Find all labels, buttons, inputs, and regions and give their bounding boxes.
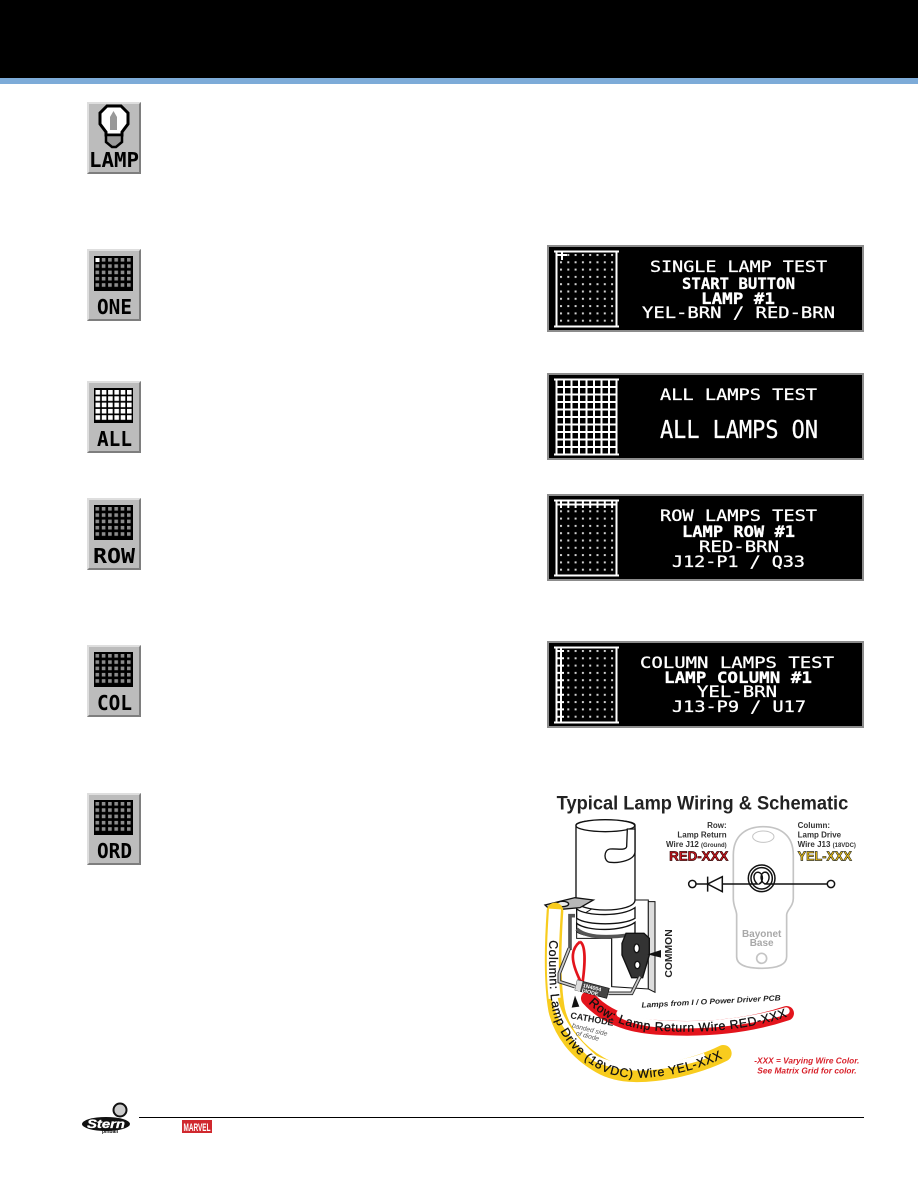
panel: row lamps test display: LAMP ROW #1 xyxy=(682,522,795,541)
column wire label xyxy=(798,821,856,864)
icon: all lamps button: ALL xyxy=(97,427,132,451)
panel: column lamps test display xyxy=(548,642,863,727)
wire color note xyxy=(754,1057,859,1075)
wire color note: See Matrix Grid for color. xyxy=(757,1066,857,1075)
ground strap xyxy=(570,916,630,950)
panel: column lamps test display: YEL-BRN xyxy=(697,682,777,701)
panel: row lamps test display xyxy=(548,495,863,580)
panel: column lamps test display: COLUMN LAMPS TEST xyxy=(640,653,834,672)
cathode label: banded side xyxy=(571,1022,608,1038)
cathode label: CATHODE xyxy=(570,1010,614,1028)
panel: row lamps test display: J12-P1 / Q33 xyxy=(672,552,805,571)
common terminal label xyxy=(647,929,675,978)
icon: order button xyxy=(87,793,141,865)
icon: single lamp button xyxy=(87,249,141,321)
cylinder xyxy=(576,820,635,910)
column wire label: YEL-XXX xyxy=(798,850,852,864)
column wire label: Lamp Drive xyxy=(798,830,842,839)
diagram title: Typical Lamp Wiring & Schematic xyxy=(557,793,849,814)
lamp socket xyxy=(545,820,655,992)
panel: single lamp test display: SINGLE LAMP TEST xyxy=(650,257,827,276)
header band xyxy=(0,0,918,84)
yellow column wire: Column: Lamp Drive (18VDC) Wire YEL-XXX xyxy=(548,940,722,1080)
schematic symbol xyxy=(689,865,835,892)
panel: all lamps test display: ALL LAMPS ON xyxy=(660,415,818,444)
common terminal xyxy=(622,933,649,978)
diode xyxy=(559,948,640,998)
icon: lamp button xyxy=(87,102,141,174)
logo: stern pinball xyxy=(82,1104,130,1135)
panel: all lamps test display xyxy=(548,374,863,459)
icon: row lamps button xyxy=(87,498,141,570)
panel: all lamps test display: ALL LAMPS TEST xyxy=(660,385,817,404)
panel: row lamps test display: RED-BRN xyxy=(699,537,779,556)
column wire label: Column: xyxy=(798,821,830,830)
cathode label xyxy=(570,996,614,1045)
common terminal label: COMMON xyxy=(664,929,675,978)
bulb outline xyxy=(733,827,793,968)
logo: stern pinball: pinball xyxy=(102,1129,119,1135)
panel: row lamps test display: ROW LAMPS TEST xyxy=(660,506,817,525)
logo: marvel xyxy=(182,1120,212,1134)
panel: single lamp test display xyxy=(548,246,863,331)
column wire label: Wire J13 (18VDC) xyxy=(798,840,856,849)
panel: single lamp test display: LAMP #1 xyxy=(701,289,775,308)
footer rule xyxy=(139,1117,864,1118)
power driver note: Lamps from I / O Power Driver PCB xyxy=(641,993,781,1010)
diode: 1N4004 xyxy=(582,983,602,993)
icon: lamp button: LAMP xyxy=(89,148,139,172)
row wire label: Wire J12 (Ground) xyxy=(666,840,727,849)
red row wire: Row: Lamp Return Wire RED-XXX xyxy=(588,998,788,1032)
bayonet base label: Base xyxy=(750,938,774,949)
icon: single lamp button: ONE xyxy=(97,295,132,319)
panel: single lamp test display: START BUTTON xyxy=(682,274,795,293)
mounting bracket xyxy=(577,900,648,989)
icon: column lamps button xyxy=(87,645,141,717)
cathode label: of diode xyxy=(575,1030,600,1043)
panel: column lamps test display: J13-P9 / U17 xyxy=(672,697,806,716)
icon: order button: ORD xyxy=(97,839,132,863)
logo: stern pinball: Stern xyxy=(87,1117,125,1131)
wire color note: -XXX = Varying Wire Color. xyxy=(754,1057,859,1066)
row wire label xyxy=(666,821,728,864)
diode: DIODE xyxy=(581,988,599,998)
row wire label: RED-XXX xyxy=(669,849,728,864)
icon: column lamps button: COL xyxy=(97,691,132,715)
panel: column lamps test display: LAMP COLUMN #1 xyxy=(664,668,812,687)
panel: single lamp test display: YEL-BRN / RED-BRN xyxy=(642,303,835,322)
diagram: typical lamp wiring and schematic xyxy=(544,793,859,1082)
logo: marvel: MARVEL xyxy=(184,1122,211,1134)
icon: all lamps button xyxy=(87,381,141,453)
bayonet base label: Bayonet xyxy=(742,929,781,940)
row wire label: Lamp Return xyxy=(677,830,727,839)
icon: row lamps button: ROW xyxy=(93,544,136,568)
red row wire xyxy=(572,940,794,1036)
row wire label: Row: xyxy=(707,821,727,830)
